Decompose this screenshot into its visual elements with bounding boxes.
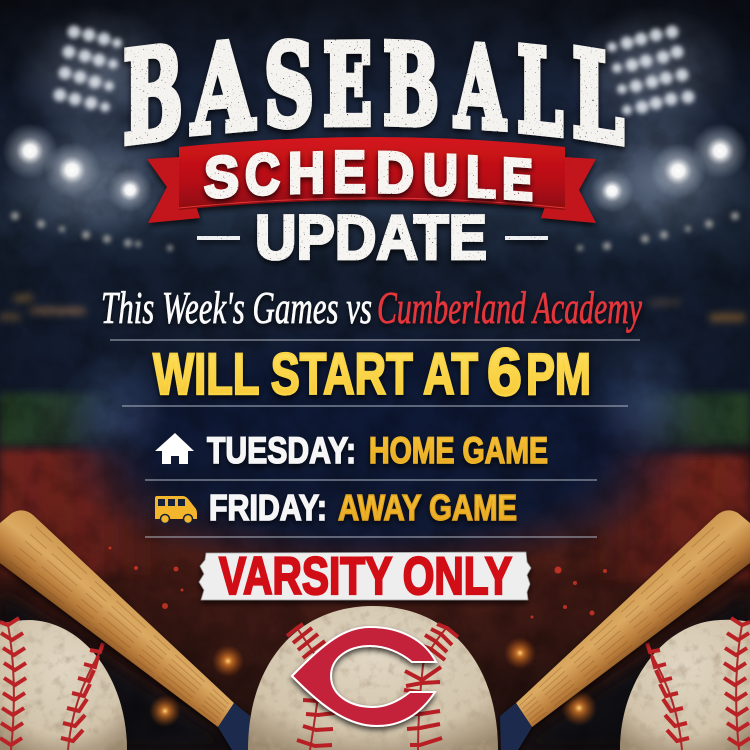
subtitle: SCHEDULE: E [333, 140, 366, 205]
baseball left [0, 618, 127, 750]
title: BASEBALL: A [454, 21, 506, 156]
headline: will start at 6pm: PM [526, 342, 591, 407]
subtitle: SCHEDULE [204, 140, 533, 213]
subtitle: SCHEDULE: C [245, 141, 280, 208]
title: BASEBALL: A [191, 16, 255, 162]
icon: van [155, 496, 197, 524]
headline: will start at 6pm: WILL START AT [153, 342, 478, 407]
title: BASEBALL: B [123, 17, 183, 173]
sparks [108, 546, 607, 727]
badge: varsity only: VARSITY ONLY [219, 547, 512, 606]
row: friday away game: AWAY GAME [338, 487, 517, 528]
title: BASEBALL: S [264, 19, 314, 153]
subtitle: SCHEDULE: L [466, 144, 496, 211]
script line: this week's games: This Week's Games vs [101, 282, 372, 333]
subtitle: SCHEDULE: S [204, 144, 239, 211]
title: BASEBALL: B [383, 20, 439, 152]
subtitle: SCHEDULE: U [423, 142, 458, 208]
headline: will start at 6pm: 6 [487, 335, 522, 410]
baseball right [620, 618, 750, 750]
subtitle: SCHEDULE: E [502, 146, 533, 213]
title: BASEBALL: E [323, 21, 372, 151]
red ribbon banner [147, 137, 596, 223]
row: friday away game [209, 487, 517, 528]
divider lines [110, 340, 640, 537]
row: tuesday home game: TUESDAY: [207, 430, 356, 471]
title: BASEBALL: L [572, 24, 624, 172]
row: tuesday home game: HOME GAME [369, 430, 548, 471]
floodlight right [607, 26, 694, 115]
baseball center [248, 606, 498, 750]
subtitle: SCHEDULE: D [376, 140, 414, 206]
title: BASEBALL: L [517, 22, 563, 163]
icon: home [155, 433, 194, 464]
stadium glow lights [2, 123, 748, 251]
baseball bat right [500, 510, 750, 750]
subtitle: SCHEDULE: H [288, 140, 325, 206]
logo: letter C [292, 627, 436, 726]
title: UPDATE with dashes: UPDATE [255, 203, 487, 273]
baseball bat left [0, 510, 250, 750]
row: friday away game: FRIDAY: [209, 487, 327, 528]
floodlight left [54, 26, 122, 112]
row: tuesday home game [207, 430, 548, 471]
title: BASEBALL [123, 16, 624, 173]
